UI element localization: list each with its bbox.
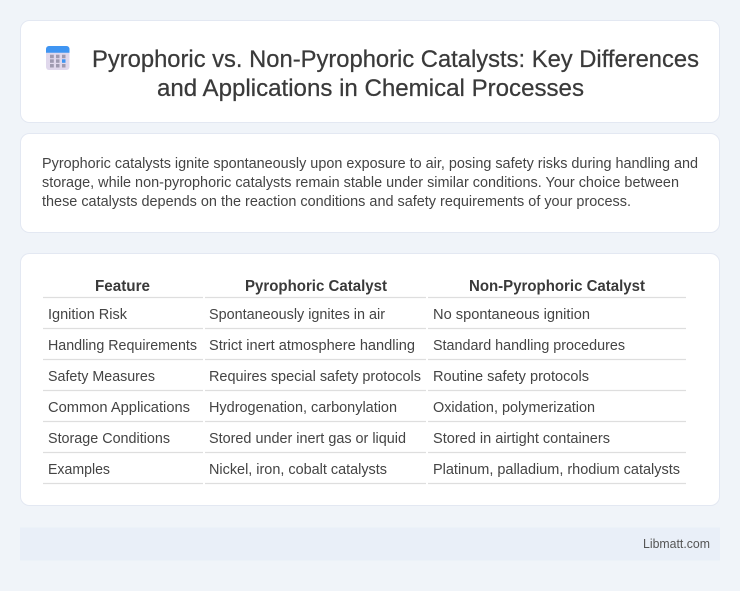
row: handling requirements: Standard handling procedures: [433, 338, 625, 354]
footer text: Libmatt.com: [643, 537, 710, 551]
panel: comparison table: [20, 254, 720, 506]
intro text: these catalysts depends on the reaction conditions and safety requirements of your process.: [42, 194, 631, 210]
intro text: Pyrophoric catalysts ignite spontaneously upon exposure to air, posing safety risks during handling and: [42, 156, 698, 172]
intro text: [42, 156, 698, 210]
row: examples: Examples: [48, 462, 110, 478]
intro text: storage, while non-pyrophoric catalysts remain stable under similar conditions. Your choice between: [42, 175, 679, 191]
row: ignition risk: [48, 307, 590, 323]
row: safety measures: Requires special safety protocols: [209, 369, 421, 385]
title: and Applications in Chemical Processes: [157, 75, 584, 102]
row: ignition risk: No spontaneous ignition: [433, 307, 590, 323]
panel: introduction: [20, 134, 720, 232]
panel: title header: [20, 20, 720, 122]
table header: Pyrophoric Catalyst: [245, 278, 388, 295]
row: examples: Platinum, palladium, rhodium catalysts: [433, 462, 680, 478]
row: handling requirements: Strict inert atmosphere handling: [209, 338, 415, 354]
table header: [95, 278, 646, 295]
row: ignition risk: Ignition Risk: [48, 307, 128, 323]
row: examples: Nickel, iron, cobalt catalysts: [209, 462, 387, 478]
row: common applications: Oxidation, polymerization: [433, 400, 595, 416]
row: safety measures: Routine safety protocols: [433, 369, 589, 385]
footer bar: [20, 528, 720, 560]
row: storage conditions: Stored in airtight containers: [433, 431, 610, 447]
title: [92, 46, 699, 102]
row: storage conditions: Stored under inert gas or liquid: [209, 431, 406, 447]
icon: calendar grid: [46, 46, 70, 70]
row: common applications: Hydrogenation, carbonylation: [209, 400, 397, 416]
row: storage conditions: [48, 431, 610, 447]
title: Pyrophoric vs. Non-Pyrophoric Catalysts: Key Differences: [92, 46, 699, 73]
row: storage conditions: Storage Conditions: [48, 431, 170, 447]
row: handling requirements: Handling Requirements: [48, 338, 197, 354]
row: safety measures: Safety Measures: [48, 369, 155, 385]
row: safety measures: [48, 369, 589, 385]
row: ignition risk: Spontaneously ignites in air: [209, 307, 385, 323]
table header: Non-Pyrophoric Catalyst: [469, 278, 646, 295]
row: examples: [48, 462, 680, 478]
table header: Feature: [95, 278, 150, 295]
row: common applications: Common Applications: [48, 400, 190, 416]
row: handling requirements: [48, 338, 625, 354]
row: common applications: [48, 400, 595, 416]
